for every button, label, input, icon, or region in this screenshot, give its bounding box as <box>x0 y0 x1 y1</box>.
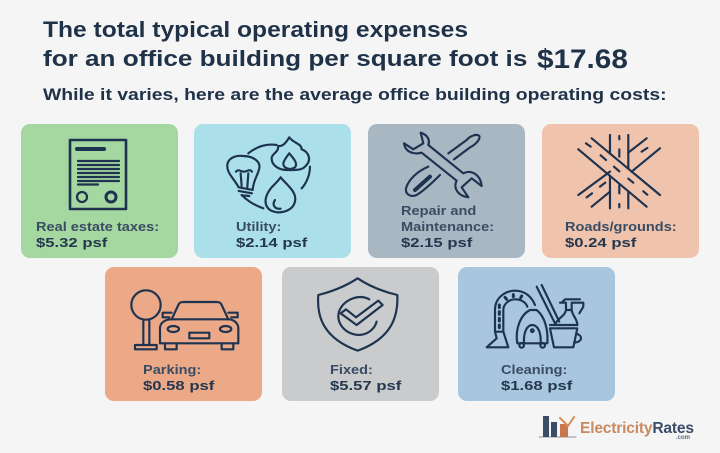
label <box>401 204 494 250</box>
icon: shield with check <box>317 277 398 352</box>
logo suffix: .com <box>676 435 690 441</box>
icon: wrench and screwdriver <box>402 132 483 198</box>
icon: bulb, flame and drop <box>226 136 312 214</box>
panel: cleaning <box>458 267 615 401</box>
icon: crossing roads <box>577 134 662 210</box>
label: Roads/grounds: <box>565 220 677 234</box>
label: Parking: <box>143 363 201 377</box>
label <box>565 220 677 250</box>
panel: utility <box>194 124 351 258</box>
label <box>501 363 572 393</box>
panel: fixed <box>282 267 439 401</box>
label: Maintenance: <box>401 220 494 234</box>
label: $2.14 psf <box>236 235 307 250</box>
icon: parking sign and car <box>130 289 240 350</box>
label: Fixed: <box>330 363 373 377</box>
icon: tax document <box>68 138 128 210</box>
label: $1.68 psf <box>501 378 572 393</box>
label: $0.58 psf <box>143 378 214 393</box>
label: $5.32 psf <box>36 235 107 250</box>
subtitle: While it varies, here are the average office building operating costs: <box>43 85 667 104</box>
label: Repair and <box>401 204 476 218</box>
label <box>236 220 308 250</box>
label <box>36 220 159 250</box>
label: Utility: <box>236 220 281 234</box>
label <box>143 363 214 393</box>
panel: roads/grounds <box>542 124 699 258</box>
label: Cleaning: <box>501 363 567 377</box>
icon: logo buildings <box>538 416 576 438</box>
label <box>330 363 402 393</box>
label: $2.15 psf <box>401 235 472 250</box>
title <box>43 17 628 74</box>
total cost figure: $17.68 <box>537 44 628 74</box>
logo: ElectricityRates.com <box>538 416 694 441</box>
label: Real estate taxes: <box>36 220 159 234</box>
label: $5.57 psf <box>330 378 401 393</box>
logo wordmark: ElectricityRates <box>580 420 694 437</box>
icon: vacuum and cleaning supplies <box>486 284 584 349</box>
panel: repair and maintenance <box>368 124 525 258</box>
panel: parking <box>105 267 262 401</box>
label: $0.24 psf <box>565 235 636 250</box>
title line 2: for an office building per square foot is <box>43 46 527 71</box>
panel: real estate taxes <box>21 124 178 258</box>
title line 1: The total typical operating expenses <box>43 17 468 42</box>
